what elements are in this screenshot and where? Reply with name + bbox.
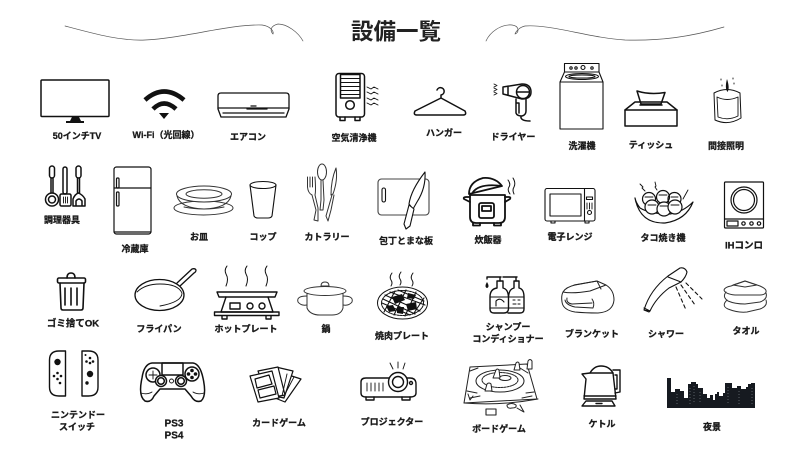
title: 設備一覧 bbox=[351, 20, 441, 44]
label: indirect lighting: 間接照明 bbox=[708, 140, 744, 151]
label: hair dryer: ドライヤー bbox=[491, 132, 535, 142]
label: IH cooker: IHコンロ bbox=[725, 240, 763, 252]
icon: air conditioner bbox=[218, 93, 289, 117]
icon: cutlery bbox=[308, 164, 337, 221]
icon: projector bbox=[361, 362, 416, 400]
icon: grill plate bbox=[378, 272, 428, 319]
label: PS3 PS4 bbox=[165, 418, 184, 442]
label: towel: タオル bbox=[732, 325, 760, 336]
label: Nintendo Switch: ニンテンドー bbox=[51, 410, 105, 420]
label: shampoo and conditioner: シャンプー bbox=[486, 322, 530, 332]
icon: kettle bbox=[582, 366, 620, 406]
label: microwave: 電子レンジ bbox=[547, 232, 593, 242]
label: hanger: ハンガー bbox=[426, 127, 462, 138]
label: rice cooker: 炊飯器 bbox=[474, 234, 502, 245]
label: frying pan: フライパン bbox=[136, 324, 182, 334]
label: PS3 PS4: PS3 bbox=[165, 418, 184, 430]
label: card games: カードゲーム bbox=[252, 417, 306, 428]
icon: hair dryer bbox=[494, 84, 531, 121]
label: night view: 夜景 bbox=[703, 421, 721, 432]
label: blanket: ブランケット bbox=[565, 328, 619, 339]
label: Wi-Fi: Wi-Fi（光回線） bbox=[133, 129, 199, 140]
label: projector: プロジェクター bbox=[361, 416, 423, 427]
icon: air purifier bbox=[336, 74, 378, 120]
label: kettle: ケトル bbox=[588, 419, 616, 429]
icon: refrigerator bbox=[114, 167, 151, 234]
label: tissue: ティッシュ bbox=[629, 140, 673, 150]
label: air conditioner: エアコン bbox=[230, 132, 266, 142]
icon: frying pan bbox=[135, 269, 196, 310]
icon: hot plate bbox=[214, 266, 279, 319]
label: refrigerator: 冷蔵庫 bbox=[121, 243, 149, 254]
right flourish bbox=[486, 25, 724, 41]
label: cutlery: カトラリー bbox=[304, 232, 350, 242]
icon: tissue box bbox=[625, 91, 677, 126]
icon: knife and cutting board bbox=[378, 172, 429, 229]
label: pot: 鍋 bbox=[321, 323, 331, 334]
left flourish bbox=[65, 24, 303, 41]
label: shower: シャワー bbox=[648, 329, 684, 339]
label: takoyaki maker: タコ焼き機 bbox=[640, 232, 686, 243]
icon: rice cooker bbox=[464, 178, 515, 226]
label: shampoo and conditioner: コンディショナー bbox=[472, 333, 544, 344]
icon: cooking utensils bbox=[46, 166, 85, 206]
label: hot plate: ホットプレート bbox=[214, 324, 278, 334]
label: Nintendo Switch bbox=[51, 410, 105, 432]
label: cooking utensils: 調理器具 bbox=[44, 215, 80, 225]
icon: hanger bbox=[414, 88, 466, 115]
icon: night skyline bbox=[667, 378, 755, 408]
label: washing machine: 洗濯機 bbox=[568, 140, 596, 151]
icon: cup bbox=[250, 182, 276, 218]
icon: towel bbox=[724, 281, 766, 312]
label: 50 inch TV: 50インチTV bbox=[53, 131, 101, 141]
icon: shampoo and conditioner bbox=[486, 277, 524, 313]
icon: induction cooker bbox=[724, 182, 764, 228]
label: grill plate: 焼肉プレート bbox=[375, 330, 429, 341]
label: shampoo and conditioner bbox=[472, 322, 544, 344]
icon: plates bbox=[174, 186, 233, 215]
icon: blanket bbox=[562, 281, 614, 313]
icon: trash can bbox=[58, 273, 86, 310]
icon: Nintendo Switch Joy-Cons bbox=[50, 351, 98, 396]
icon: board game bbox=[464, 360, 538, 415]
icon: game controller bbox=[141, 363, 205, 401]
icon: washing machine bbox=[560, 64, 603, 129]
icon: Wi-Fi bbox=[145, 92, 184, 119]
icon: shower bbox=[644, 268, 702, 312]
label: cup: コップ bbox=[249, 232, 277, 242]
label: board game: ボードゲーム bbox=[472, 423, 526, 434]
icon: playing cards bbox=[250, 367, 301, 402]
label: air purifier: 空気清浄機 bbox=[331, 132, 377, 143]
icon: microwave bbox=[545, 188, 595, 223]
icon: takoyaki bbox=[635, 182, 693, 223]
icon: TV bbox=[41, 80, 109, 123]
icon: pot bbox=[298, 282, 352, 315]
label: knife and cutting board: 包丁とまな板 bbox=[379, 235, 433, 246]
label: plates: お皿 bbox=[190, 232, 208, 242]
label: trash OK: ゴミ捨てOK bbox=[47, 318, 99, 330]
icon: candle bbox=[714, 78, 741, 123]
label: PS3 PS4: PS4 bbox=[165, 430, 184, 442]
label: Nintendo Switch: スイッチ bbox=[59, 422, 95, 432]
